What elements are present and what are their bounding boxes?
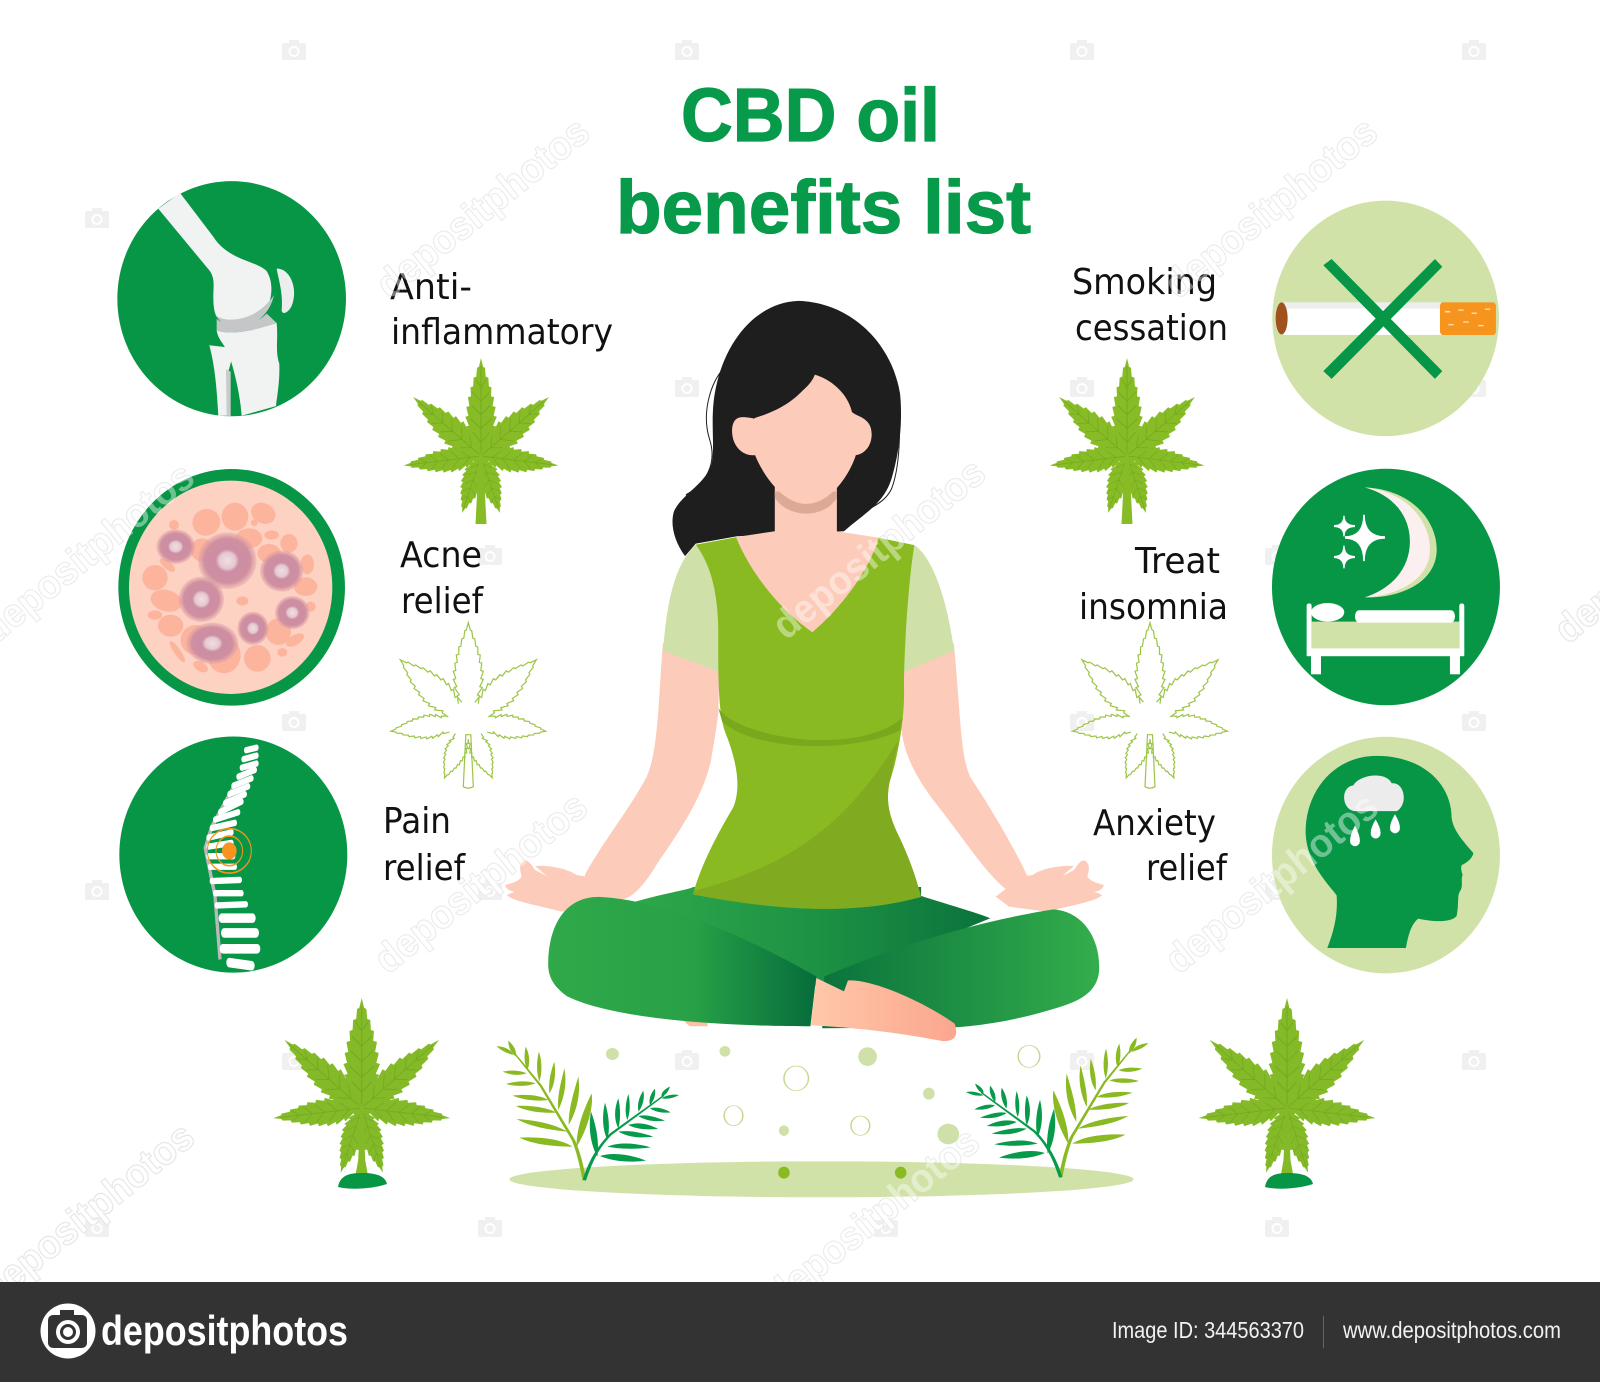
left hand [505,860,613,912]
neck shadow [775,491,837,514]
label: Anxiety relief [1093,803,1228,889]
hidden foot [684,1021,708,1026]
watermark overlay: depositphotos [1157,784,1387,982]
label: Anti-inflammatory: Anti- [390,267,472,308]
ground ellipse [509,1161,1133,1197]
ferns right [966,1038,1148,1178]
lap [634,887,990,986]
watermark pattern: depositphotos [758,1119,988,1317]
label: Smoking cessation: cessation [1075,308,1228,349]
right hand [996,860,1104,912]
left leg [548,897,816,1026]
watermark pattern: depositphotos [366,784,596,982]
label: Treat insomnia: Treat [1134,541,1220,582]
footer logo: depositphotos [101,1307,348,1354]
icon: outlined cannabis leaf right [1071,623,1229,788]
watermark overlay: depositphotos [1156,109,1386,307]
face [732,375,872,504]
label: Acne relief: Acne [400,535,482,576]
icon: spine with pain point [119,737,347,973]
footer logo [40,1304,348,1358]
sleeves [663,545,954,672]
left arm [585,643,719,902]
watermark overlay: depositphotos [758,1119,988,1317]
label: Acne relief: relief [401,581,484,622]
hair [672,301,901,556]
watermark pattern: depositphotos [368,109,598,307]
watermark pattern: depositphotos [1157,784,1387,982]
icon: acne skin [118,469,345,706]
hair strands [686,369,899,513]
icon: head with rain cloud [1272,737,1500,973]
icon: outlined cannabis leaf left [389,623,547,788]
footer website: www.depositphotos.com [1342,1317,1561,1343]
title: CBD oil [681,73,940,157]
label: Anti-inflammatory [390,267,613,353]
icon: moon, stars and bed [1272,469,1500,705]
icon: filled cannabis leaf left [402,358,560,524]
footer bar [0,1282,1600,1382]
watermark pattern: depositphotos [1156,109,1386,307]
hair parting line [753,375,814,418]
foot [811,978,956,1041]
cannabis plant left [272,998,452,1189]
title: benefits list [616,165,1031,249]
icon: knee joint [117,181,346,416]
watermark overlay [0,109,1387,1317]
watermark pattern: depositphotos [764,450,994,648]
label: Treat insomnia: insomnia [1079,587,1228,628]
icon: no smoking [1272,201,1499,436]
right arm [901,643,1028,908]
label: Smoking cessation [1072,262,1228,349]
label: Pain relief: relief [383,848,466,889]
floating bubbles [606,1045,1040,1179]
ferns left [497,1041,679,1181]
label: Pain relief: Pain [383,801,451,842]
green top [693,537,921,909]
waist band [718,708,903,746]
label: Acne relief [400,535,484,622]
label: Pain relief [383,801,466,889]
footer image id: Image ID: 344563370 [1112,1317,1304,1343]
top shading [693,740,921,909]
icon: filled cannabis leaf right [1048,358,1206,524]
right leg [822,909,1099,1028]
label: Anti-inflammatory: inflammatory [391,312,613,353]
neck and chest [721,479,895,658]
watermark overlay: depositphotos [764,450,994,648]
cannabis plant right [1197,998,1377,1189]
watermark overlay: depositphotos [368,109,598,307]
watermark overlay: depositphotos [366,784,596,982]
figure: meditating woman [505,301,1104,1041]
label: Anxiety relief: relief [1146,848,1228,889]
title [616,73,1031,249]
label: Smoking cessation: Smoking [1072,262,1217,303]
label: Anxiety relief: Anxiety [1093,803,1216,844]
label: Treat insomnia [1079,541,1228,628]
